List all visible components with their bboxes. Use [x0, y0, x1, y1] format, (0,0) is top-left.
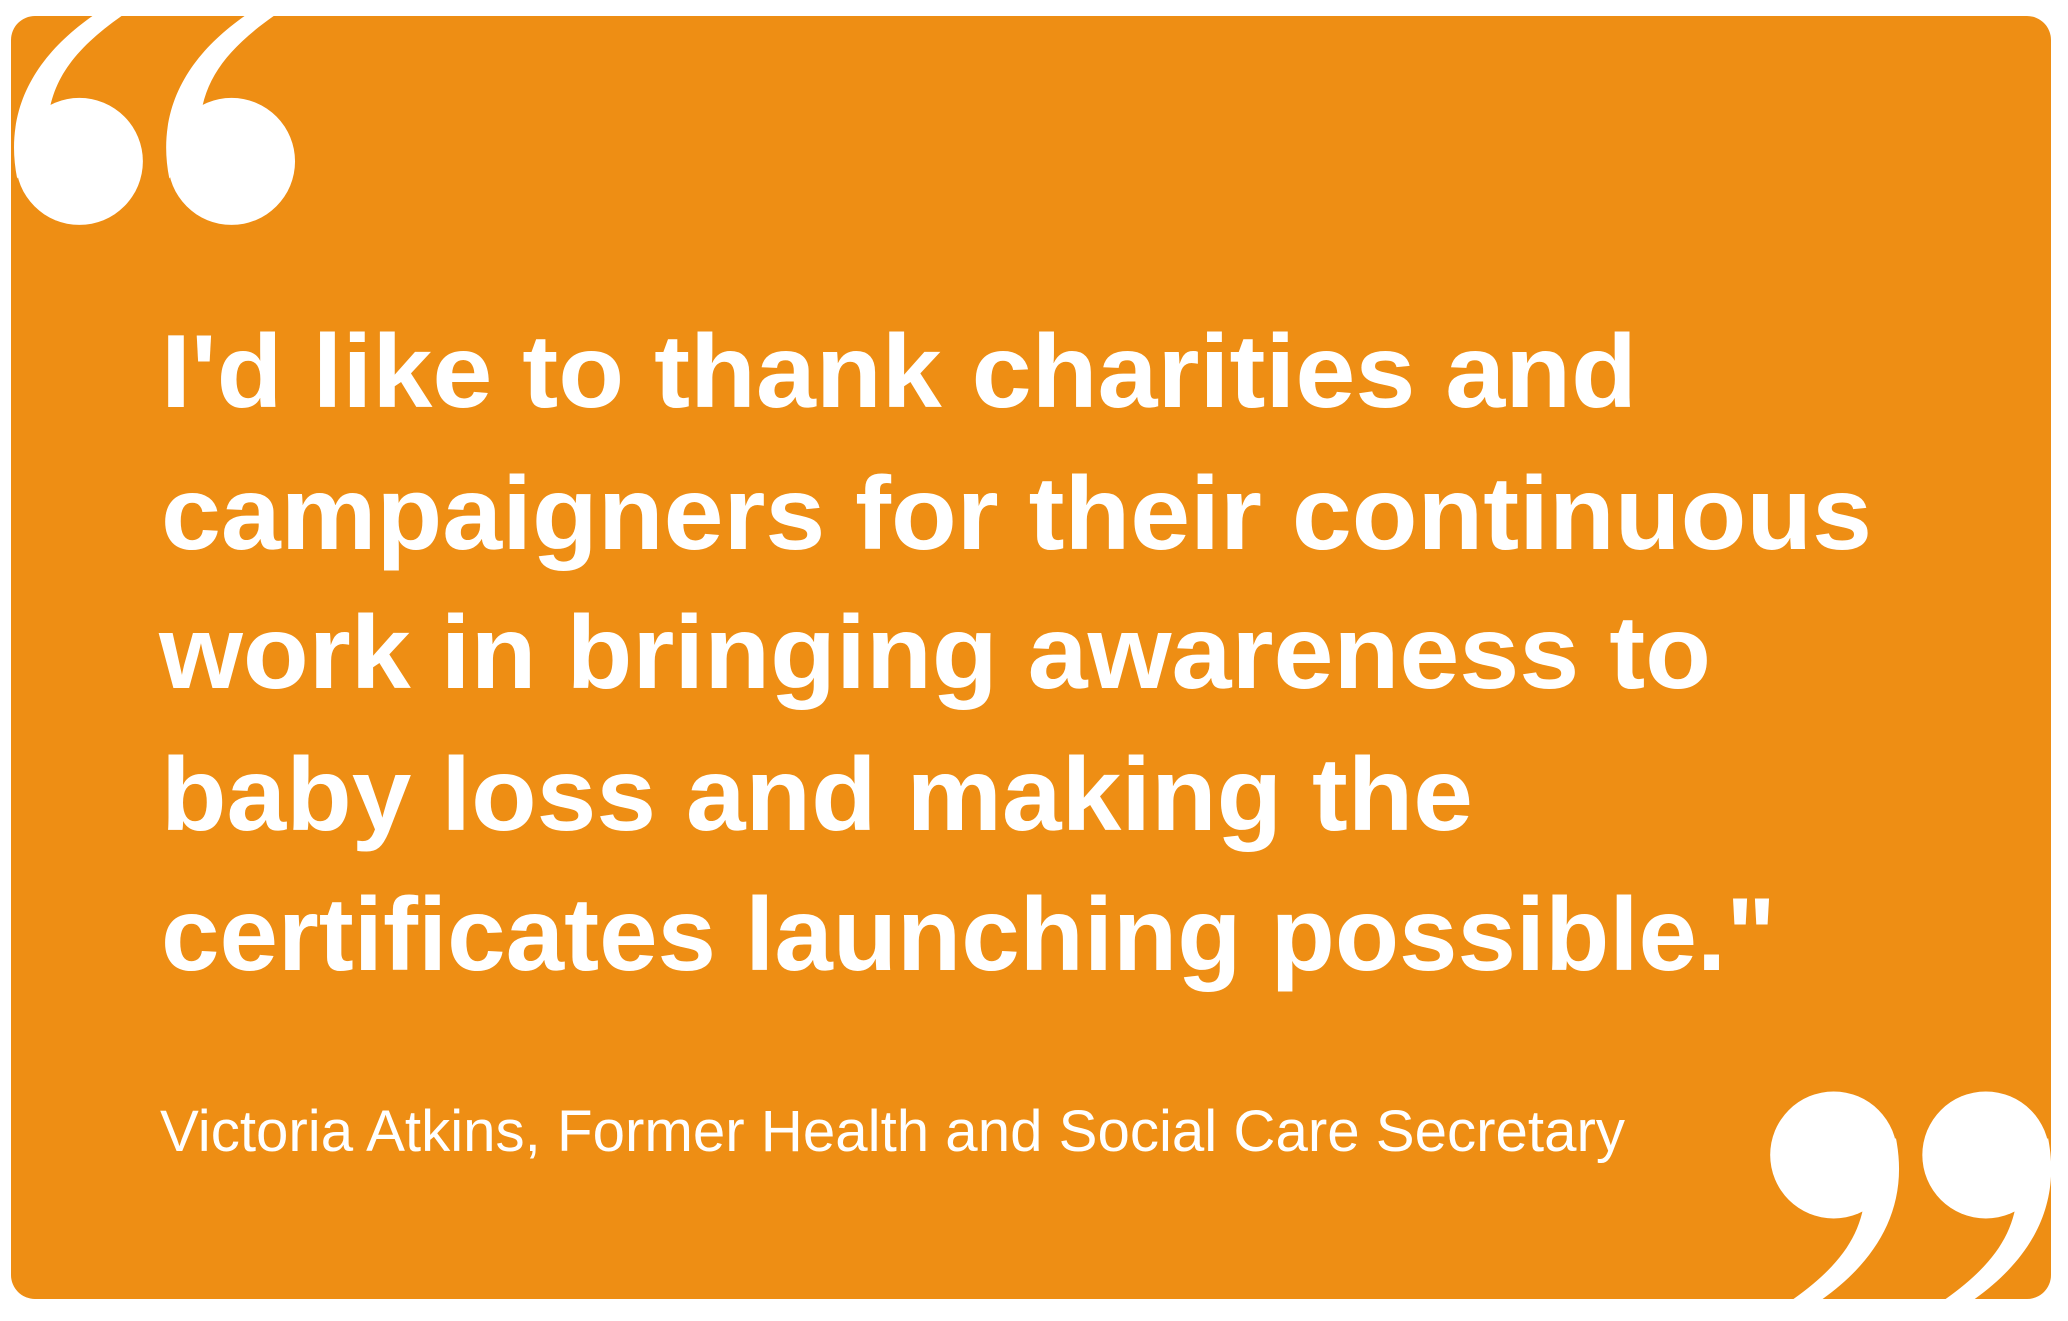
attribution: Victoria Atkins, Former Health and Social Care Secretary: [160, 1099, 1625, 1164]
quote text: [158, 314, 1872, 993]
quote text: I'd like to thank charities and: [161, 314, 1637, 430]
icon: opening quote mark: [14, 16, 295, 225]
quote text: work in bringing awareness to: [158, 595, 1711, 711]
quote text: baby loss and making the: [161, 737, 1473, 853]
quote text: certificates launching possible.": [161, 877, 1776, 993]
quote text: campaigners for their continuous: [161, 456, 1872, 572]
icon: closing quote mark: [1770, 1091, 2051, 1301]
